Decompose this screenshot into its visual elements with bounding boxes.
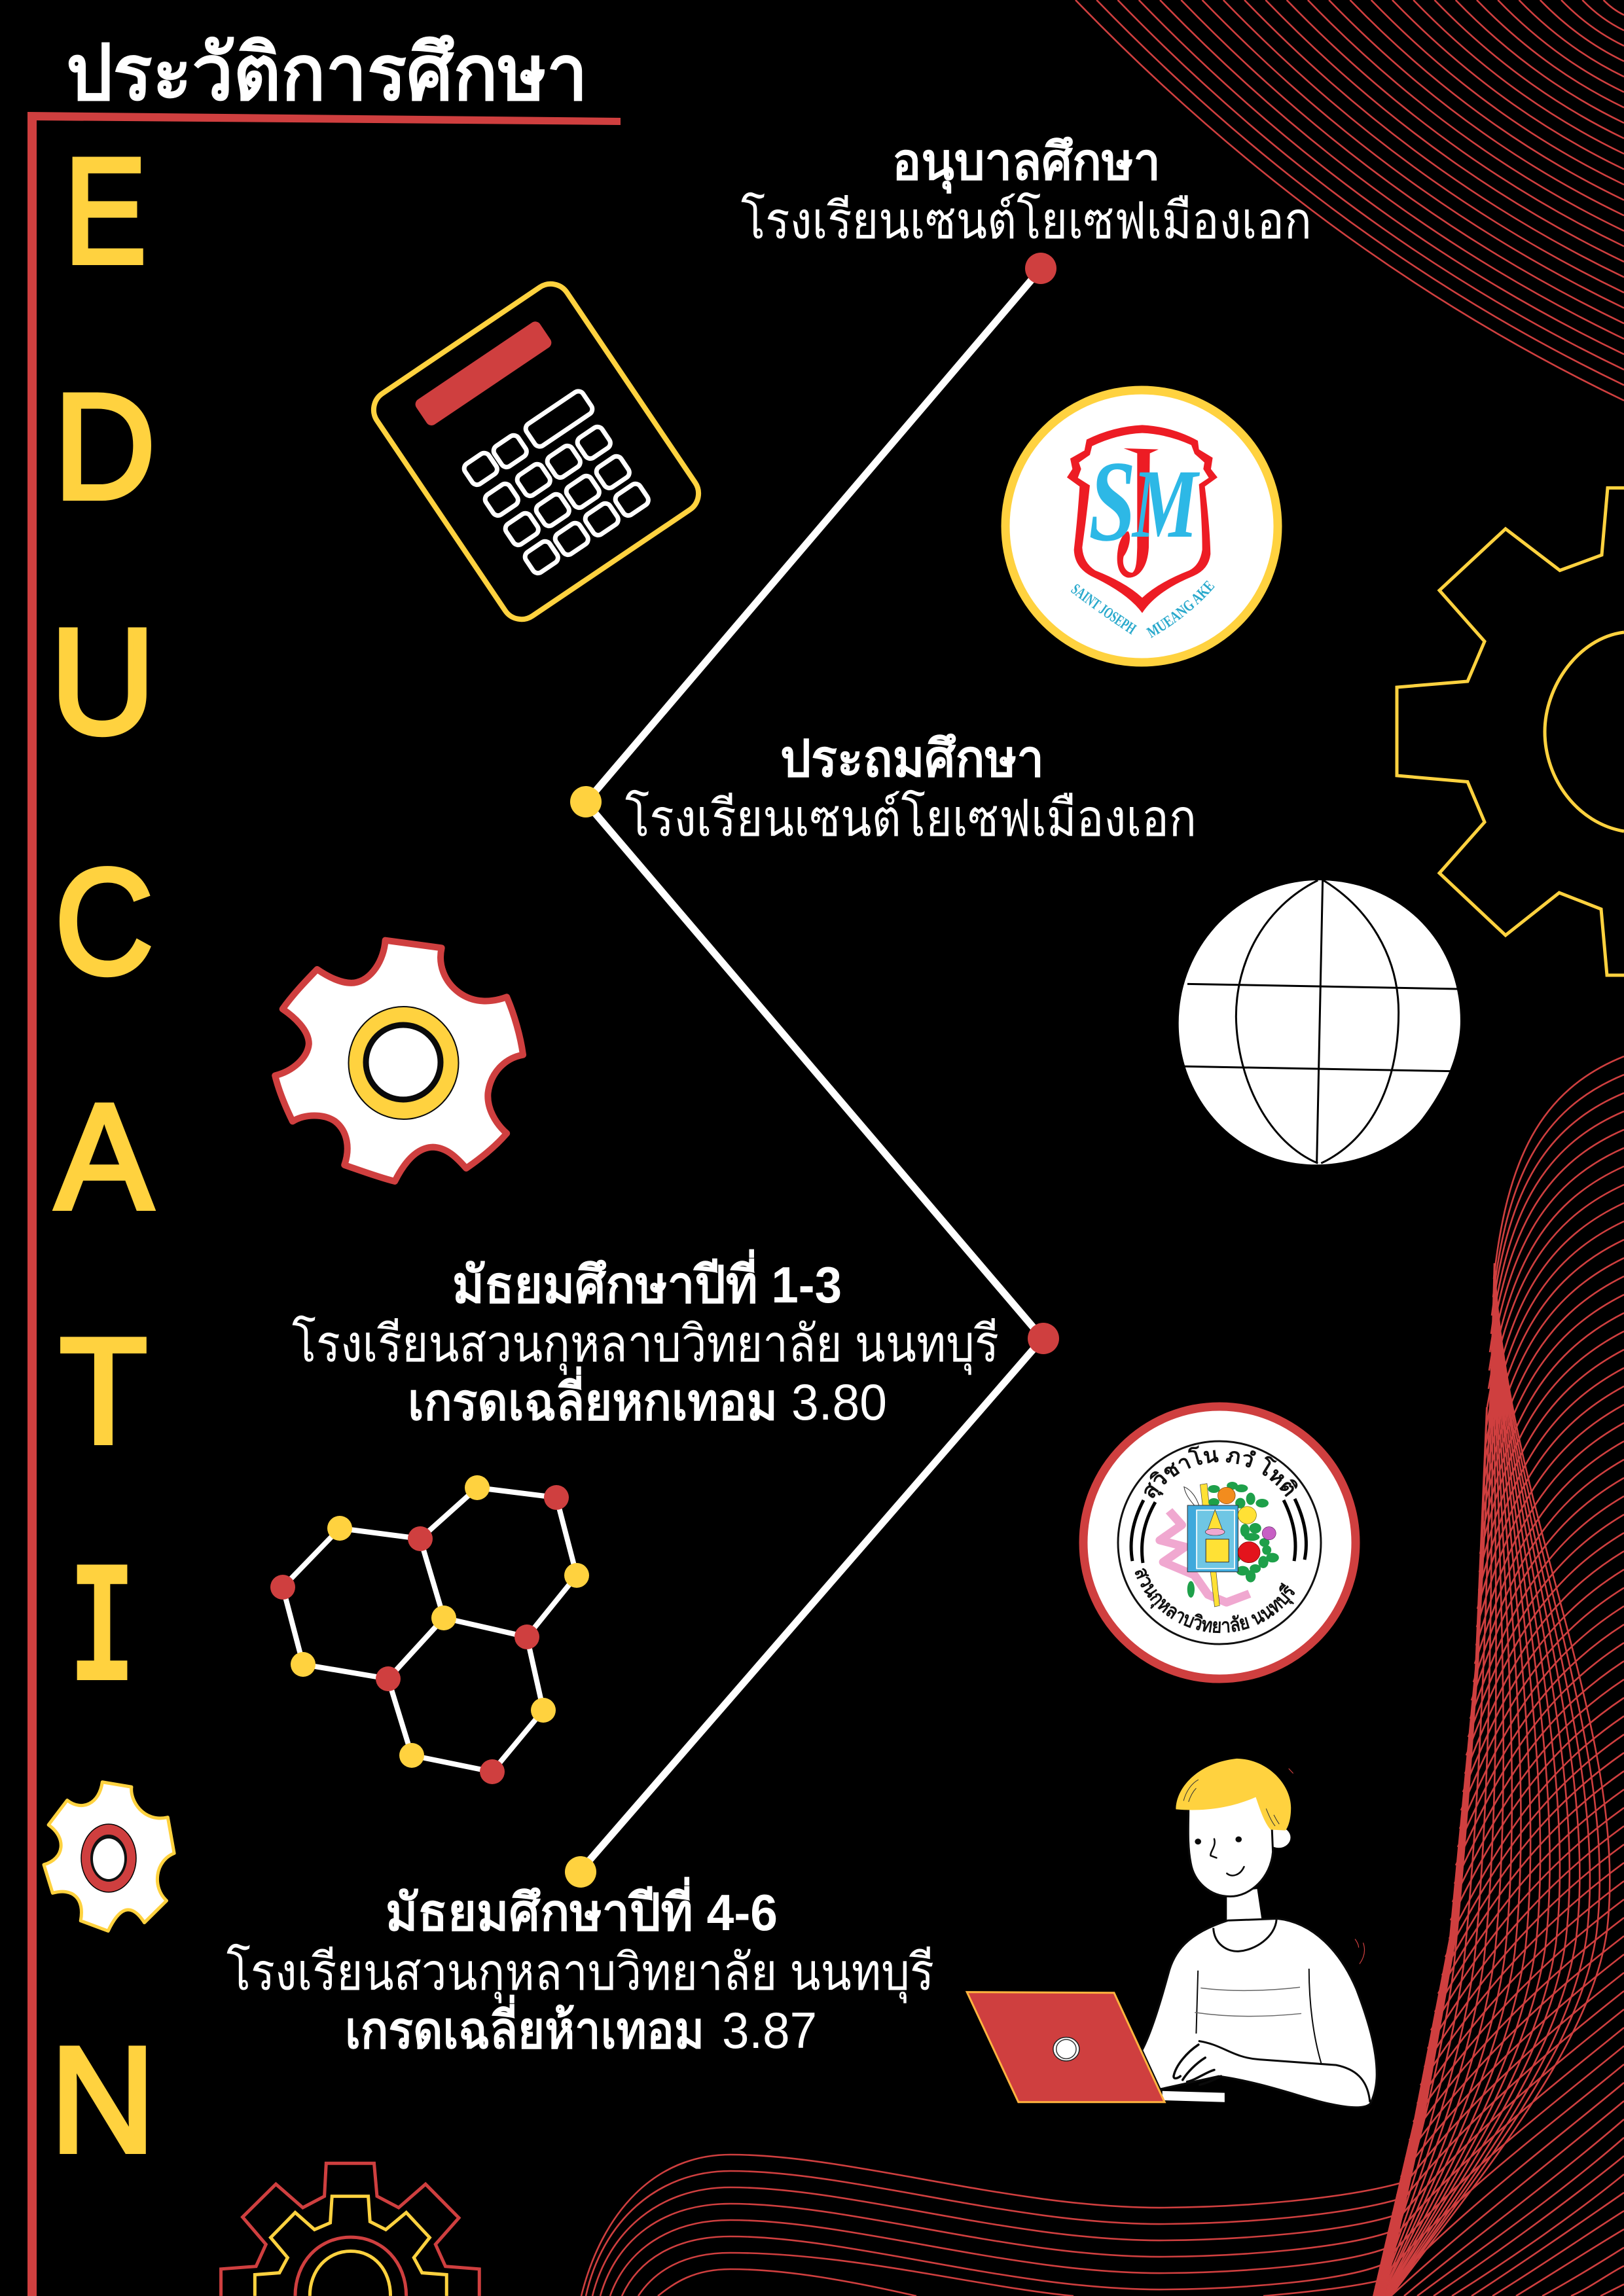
text block: upper secondary: เกรดเฉลี่ยห้าเทอม: [345, 1994, 704, 2059]
vertical word EDUCATION: [50, 127, 156, 2183]
icon: molecule hexagon network: [270, 1475, 589, 1784]
text block: kindergarten: [741, 133, 1312, 249]
logo: Saint Joseph Mueang Ake: SAINT JOSEPH: [1071, 584, 1138, 635]
logo: Saint Joseph Mueang Ake: M: [1131, 450, 1200, 558]
logo: Suankularb Wittayalai Nonthaburi: [1079, 1402, 1360, 1683]
vertical word EDUCATION: E: [64, 127, 147, 295]
text block: kindergarten: อนุบาลศึกษา: [892, 133, 1161, 194]
icon: gear as letter O: [44, 1782, 174, 1931]
logo: Saint Joseph Mueang Ake: MUEANG AKE: [1146, 580, 1215, 638]
vertical word EDUCATION: I: [68, 1535, 136, 1733]
red frame line: [27, 112, 621, 2296]
vertical word EDUCATION: A: [56, 1073, 153, 1240]
vertical word EDUCATION: T: [60, 1307, 147, 1475]
vertical word EDUCATION: U: [50, 598, 155, 765]
icon: large gear outline right: [1397, 488, 1624, 975]
illustration: person with laptop: [967, 1759, 1377, 2108]
text block: upper secondary: 3.87: [722, 2001, 817, 2059]
heading: ประวัติการศึกษา: [66, 30, 588, 117]
text block: primary: โรงเรียนเซนต์โยเซฟเมืองเอก: [625, 789, 1197, 847]
wave lines: top right: [1075, 0, 1624, 401]
icon: bottom gear outline: [221, 2163, 479, 2296]
vertical word EDUCATION: C: [55, 838, 153, 1005]
wave lines: bottom: [581, 2155, 1401, 2296]
vertical word EDUCATION: D: [54, 363, 156, 530]
text block: upper secondary: มัธยมศึกษาปีที่ 4-6: [386, 1876, 778, 1941]
wave mesh: right side: [1373, 1056, 1624, 2296]
logo: Saint Joseph Mueang Ake: [1001, 386, 1282, 666]
icon: calculator: [366, 276, 706, 627]
icon: globe: [1179, 880, 1460, 1164]
vertical word EDUCATION: N: [50, 2016, 155, 2183]
text block: lower secondary: เกรดเฉลี่ยหกเทอม: [408, 1366, 778, 1431]
text block: lower secondary: [292, 1249, 999, 1431]
logo: Suankularb Wittayalai Nonthaburi: สวนกุหลาบวิทยาลัย นนทบุรี: [1135, 1568, 1295, 1634]
timeline line: [580, 269, 1043, 1871]
text block: kindergarten: โรงเรียนเซนต์โยเซฟเมืองเอก: [741, 192, 1312, 249]
logo: Suankularb Wittayalai Nonthaburi: สุวิชาโน ภวํ โหติ: [1144, 1445, 1297, 1498]
text block: lower secondary: 3.80: [791, 1373, 887, 1431]
text block: upper secondary: โรงเรียนสวนกุหลาบวิทยาลัย นนทบุรี: [226, 1943, 934, 2003]
text block: primary: [625, 730, 1197, 847]
icon: white gear with red outline: [275, 941, 523, 1181]
text block: upper secondary: [226, 1876, 934, 2059]
text block: lower secondary: มัธยมศึกษาปีที่ 1-3: [452, 1249, 842, 1314]
logo: Saint Joseph Mueang Ake: S: [1089, 438, 1136, 565]
timeline dots: [565, 253, 1059, 1888]
text block: primary: ประถมศึกษา: [780, 730, 1044, 787]
text block: lower secondary: โรงเรียนสวนกุหลาบวิทยาลัย นนทบุรี: [292, 1315, 999, 1375]
